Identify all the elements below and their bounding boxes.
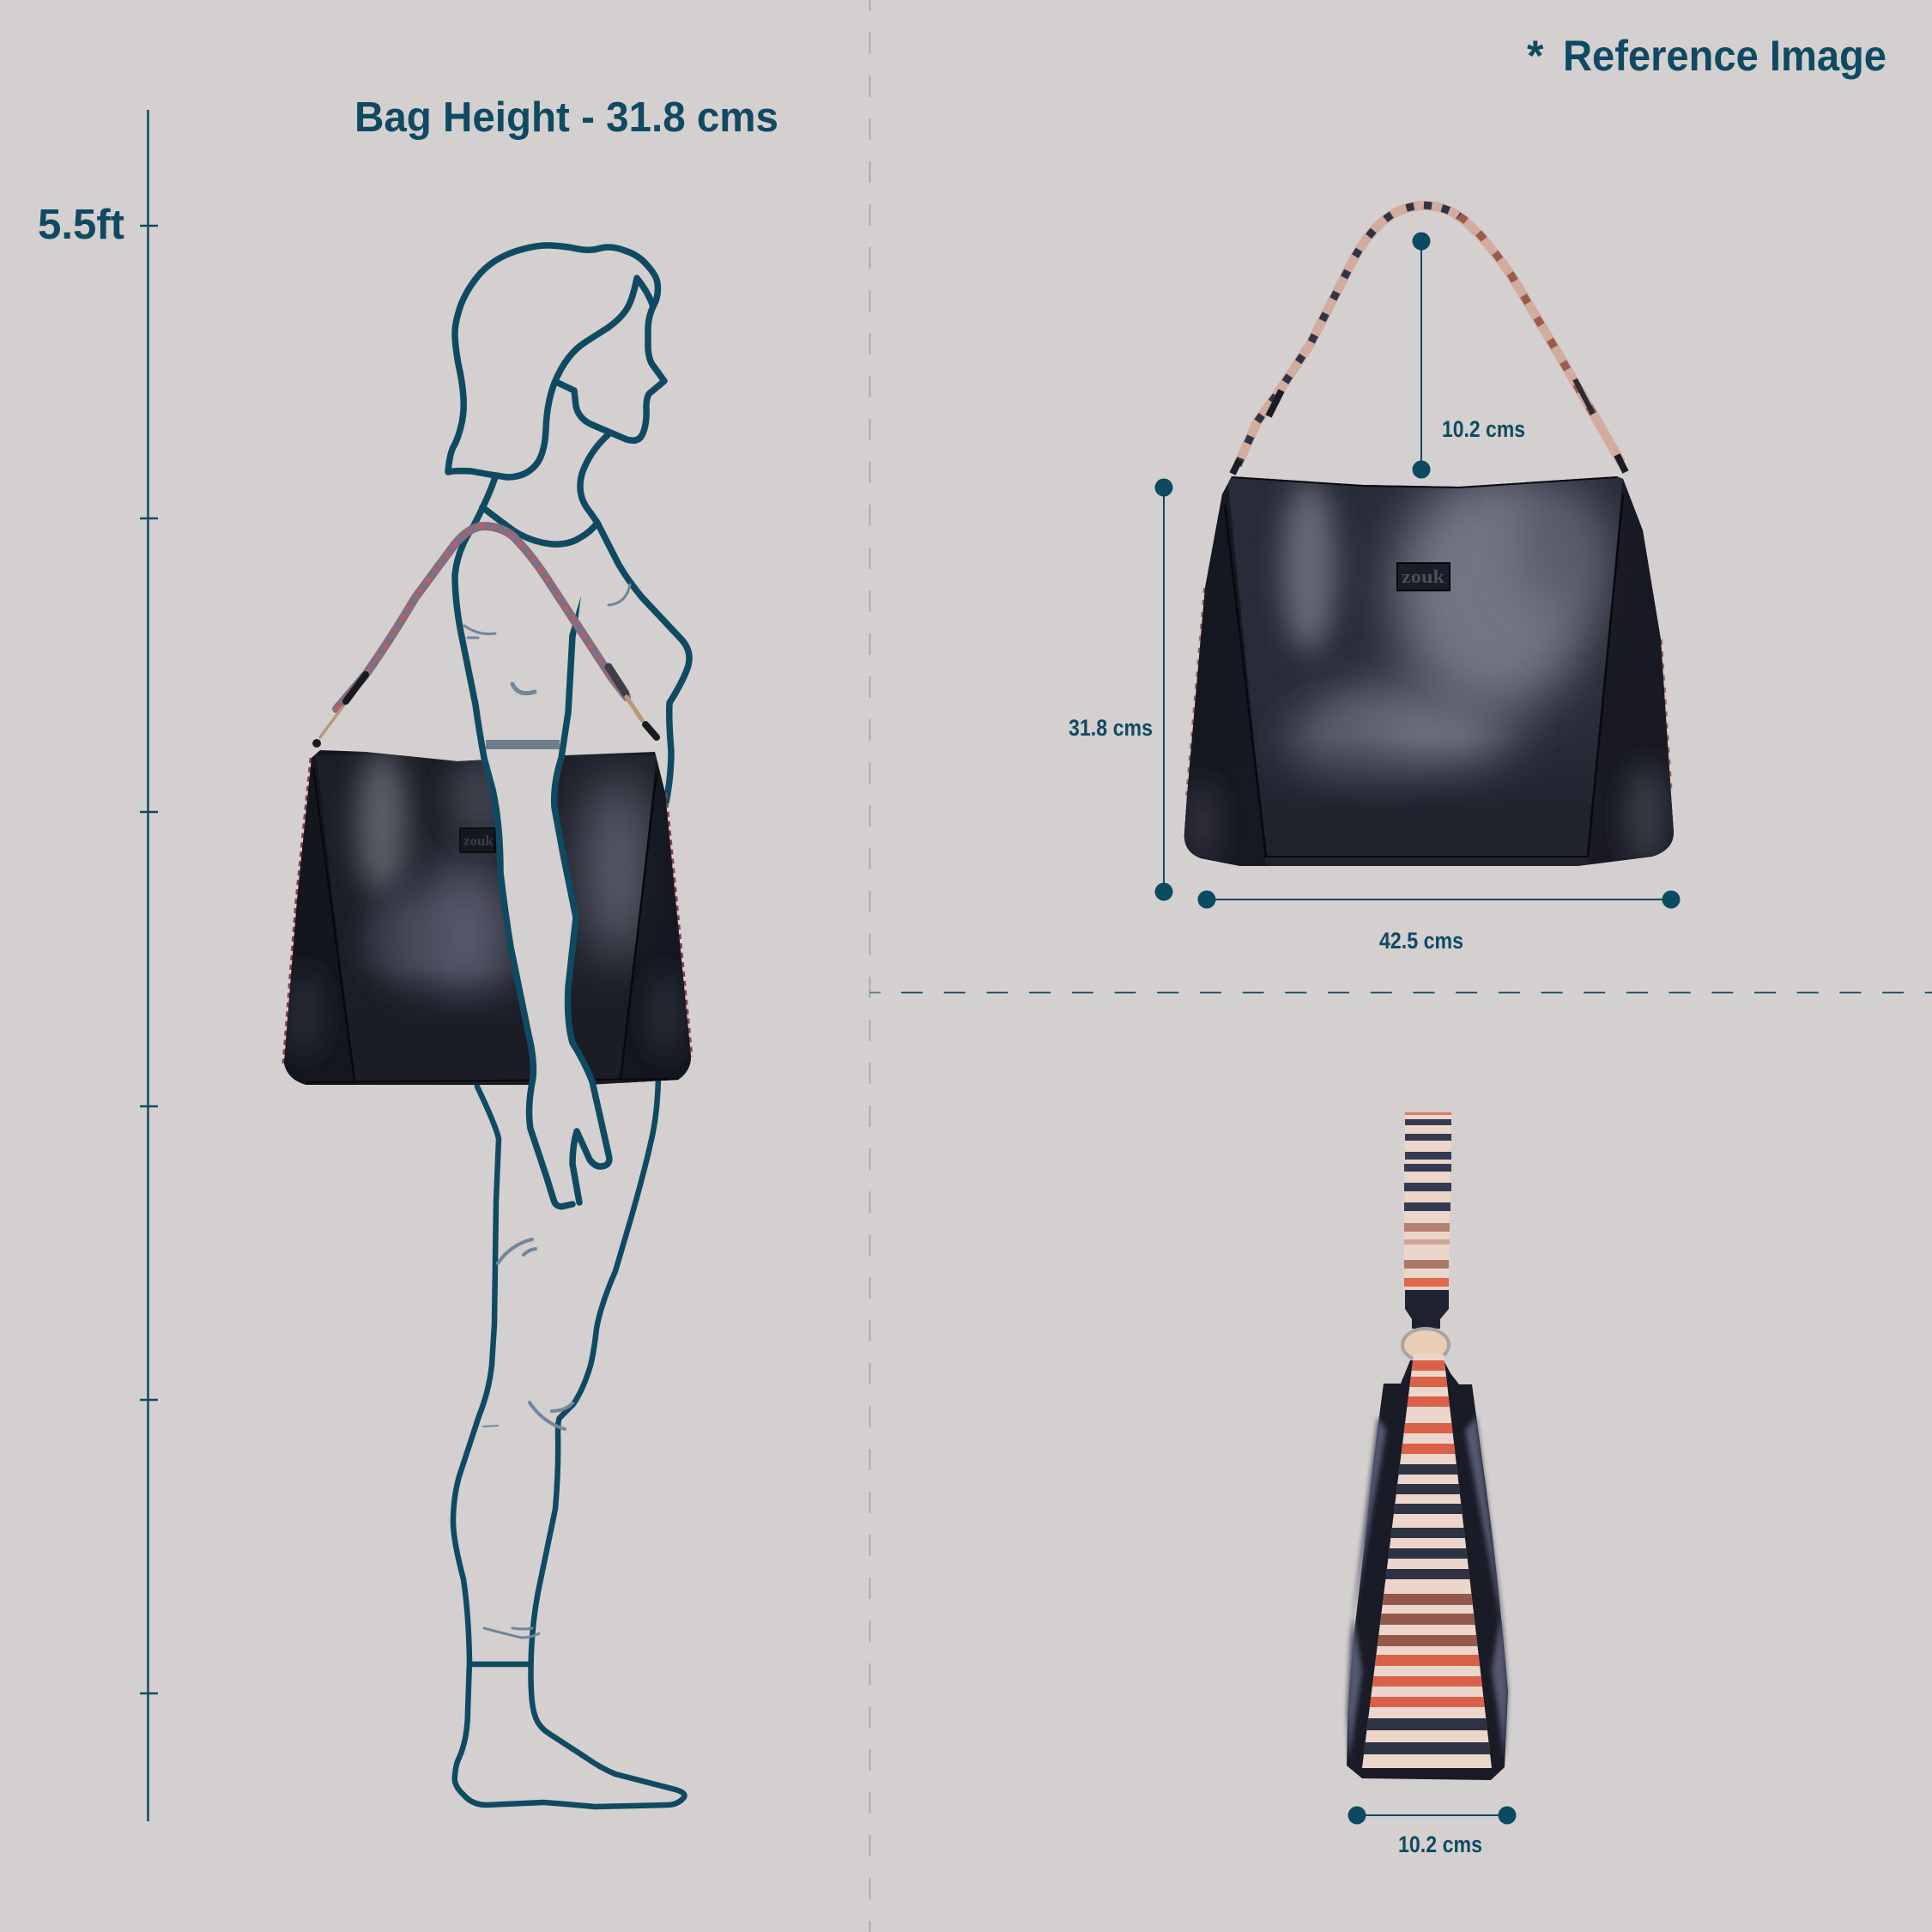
side gusset stripes: [1362, 1354, 1492, 1768]
figure: woman outline with bag on shoulder: [283, 245, 695, 1807]
horizontal dashed divider: [869, 992, 1932, 994]
dimension: handle drop 10.2 cms: [1413, 232, 1525, 479]
arm in front of bag: [455, 527, 609, 1207]
bag logo patch: zouk: [463, 833, 494, 849]
title: bag height: Bag Height - 31.8 cms: [354, 94, 778, 141]
side view bag: [1347, 1112, 1511, 1780]
side strap black tab: [1405, 1290, 1449, 1329]
front view bag: [1176, 205, 1682, 875]
dimension: depth 10.2 cms: 10.2 cms: [1398, 1832, 1482, 1857]
height label: 5.5ft: [38, 202, 124, 248]
dimension: width 42.5 cms: [1198, 891, 1681, 954]
waist band: [486, 740, 560, 749]
dimension: handle drop 10.2 cms: 10.2 cms: [1442, 416, 1525, 442]
bag strap over shoulder: [312, 526, 657, 748]
bag logo patch: [460, 828, 495, 852]
dimension: height 31.8 cms: [1069, 479, 1172, 901]
torso front: [597, 523, 689, 802]
height ruler: [140, 110, 158, 1821]
face profile: [558, 306, 664, 440]
title: reference image: *: [1527, 32, 1544, 80]
side body edge highlights: [1347, 1416, 1508, 1759]
vertical dashed divider: [869, 0, 870, 1932]
dimension: width 42.5 cms: 42.5 cms: [1379, 928, 1463, 954]
front bag logo patch: zouk: [1402, 566, 1445, 587]
title: reference image: Reference Image: [1563, 32, 1887, 80]
dimension: depth 10.2 cms: [1348, 1806, 1516, 1857]
front bag strap: [1232, 205, 1626, 474]
side body: [1347, 1360, 1508, 1780]
dimension: height 31.8 cms: 31.8 cms: [1069, 715, 1153, 741]
side strap: [1404, 1112, 1451, 1289]
metal ring: [1402, 1329, 1449, 1361]
front bag side stripes: [1187, 588, 1671, 796]
hair outline: [448, 245, 657, 471]
body detail marks: [464, 584, 630, 1638]
ankle line: [469, 1662, 529, 1667]
bag on shoulder: [283, 750, 695, 1090]
front bag logo patch: [1397, 563, 1450, 591]
neck and collar: [473, 435, 608, 544]
front bag body: [1184, 476, 1674, 866]
hair inner line: [448, 278, 653, 477]
leg and foot outline: [453, 1077, 684, 1807]
